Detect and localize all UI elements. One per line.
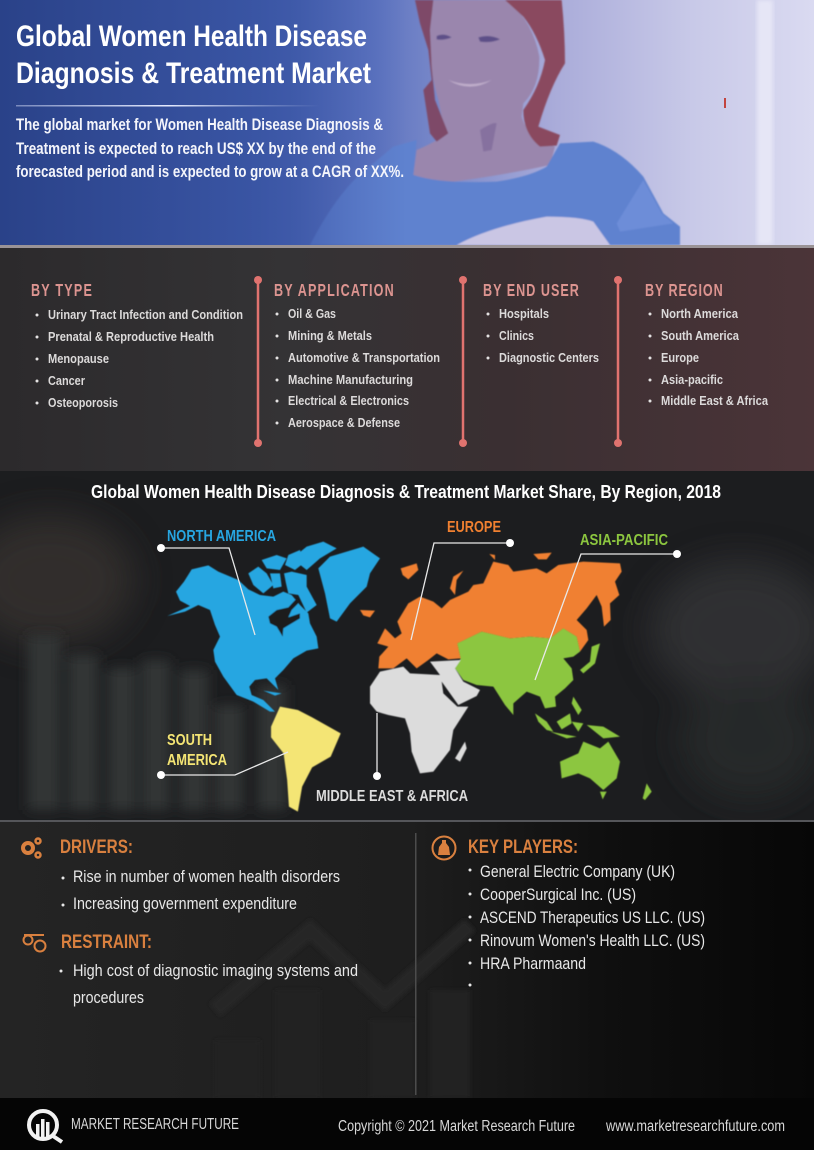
column: by type: Menopause <box>48 352 109 366</box>
column: by region: Asia-pacific <box>661 373 723 387</box>
map label: asia pacific <box>535 532 681 680</box>
block: drivers: DRIVERS: <box>60 837 133 858</box>
panel: regional market share map <box>0 471 814 820</box>
column: by region: Europe <box>661 351 699 365</box>
map label: south america: SOUTH <box>167 732 212 749</box>
column: by application: Machine Manufacturing <box>288 373 413 387</box>
icon: key player badge <box>432 836 456 860</box>
intro paragraph: The global market for Women Health Disease Diagnosis & <box>16 116 383 134</box>
block: key players: HRA Pharmaand <box>480 954 586 973</box>
map label: asia pacific: ASIA-PACIFIC <box>580 532 668 549</box>
map label: north america <box>157 528 276 635</box>
map label: middle east and africa: MIDDLE EAST & AFRICA <box>316 788 468 805</box>
block: key players: CooperSurgical Inc. (US) <box>480 885 636 904</box>
region: south america <box>271 707 341 812</box>
column: by region: BY REGION <box>645 281 723 301</box>
column: by end user: Clinics <box>499 329 534 343</box>
block: drivers: Rise in number of women health disorders <box>73 867 340 886</box>
region: north america <box>167 542 380 712</box>
region: europe and russia <box>360 553 622 668</box>
column: by application: Oil & Gas <box>288 307 336 321</box>
column: by region: North America <box>661 307 739 321</box>
icon: gears <box>23 838 40 858</box>
column: by application: Electrical & Electronics <box>288 394 409 408</box>
world map <box>167 542 652 812</box>
column: by type: Osteoporosis <box>48 396 118 410</box>
main title: Global Women Health Disease <box>16 20 367 53</box>
column: by application: Mining & Metals <box>288 329 372 343</box>
block: restraint: RESTRAINT: <box>61 932 152 953</box>
column: by application: BY APPLICATION <box>274 281 394 301</box>
main title: Diagnosis & Treatment Market <box>16 57 371 90</box>
copyright: Copyright © 2021 Market Research Future <box>338 1118 575 1135</box>
block: key players: General Electric Company (UK) <box>480 862 675 881</box>
column: by region <box>645 281 769 408</box>
column: by region: South America <box>661 329 740 343</box>
company name: MARKET RESEARCH FUTURE <box>71 1116 239 1133</box>
map label: europe <box>411 519 514 640</box>
block: drivers <box>23 837 340 913</box>
icon: market research future logo <box>29 1111 62 1142</box>
column: by application <box>274 281 440 430</box>
block: key players <box>432 836 705 986</box>
intro paragraph <box>16 116 404 181</box>
block: restraint <box>24 932 358 1007</box>
column: by end user <box>483 281 599 365</box>
column: by type: Cancer <box>48 374 85 388</box>
block: key players: ASCEND Therapeutics US LLC. (US) <box>480 908 705 927</box>
column: by end user: BY END USER <box>483 281 579 301</box>
block: drivers: Increasing government expenditure <box>73 894 297 913</box>
map label: europe: EUROPE <box>447 519 501 536</box>
block: restraint: procedures <box>73 988 144 1007</box>
region: asia pacific <box>455 628 652 800</box>
column: by region: Middle East & Africa <box>661 394 769 408</box>
map label: north america: NORTH AMERICA <box>167 528 276 545</box>
column: by end user: Diagnostic Centers <box>499 351 599 365</box>
column: by end user: Hospitals <box>499 307 549 321</box>
block: key players: Rinovum Women's Health LLC. (US) <box>480 931 705 950</box>
column: by type: Urinary Tract Infection and Condition <box>48 308 243 322</box>
column: by application: Automotive & Transportation <box>288 351 440 365</box>
column: by type: Prenatal & Reproductive Health <box>48 330 214 344</box>
region: middle east and africa <box>370 660 480 773</box>
panel: drivers, restraint and key players <box>0 820 814 1098</box>
map label: south america <box>157 732 288 779</box>
main title <box>16 20 371 90</box>
map label: middle east and africa <box>316 713 468 805</box>
panel: footer <box>0 1098 814 1150</box>
column: by application: Aerospace & Defense <box>288 416 400 430</box>
panel: header photo banner <box>0 0 814 245</box>
column: by type <box>31 281 243 410</box>
panel: market segments <box>0 248 814 471</box>
intro paragraph: forecasted period and is expected to grow at a CAGR of XX%. <box>16 163 404 181</box>
intro paragraph: Treatment is expected to reach US$ XX by the end of the <box>16 140 376 158</box>
block: restraint: High cost of diagnostic imaging systems and <box>73 961 358 980</box>
block: key players: KEY PLAYERS: <box>468 837 578 858</box>
icon: scales <box>24 935 46 952</box>
map label: south america: AMERICA <box>167 752 227 769</box>
column: by type: BY TYPE <box>31 281 92 301</box>
